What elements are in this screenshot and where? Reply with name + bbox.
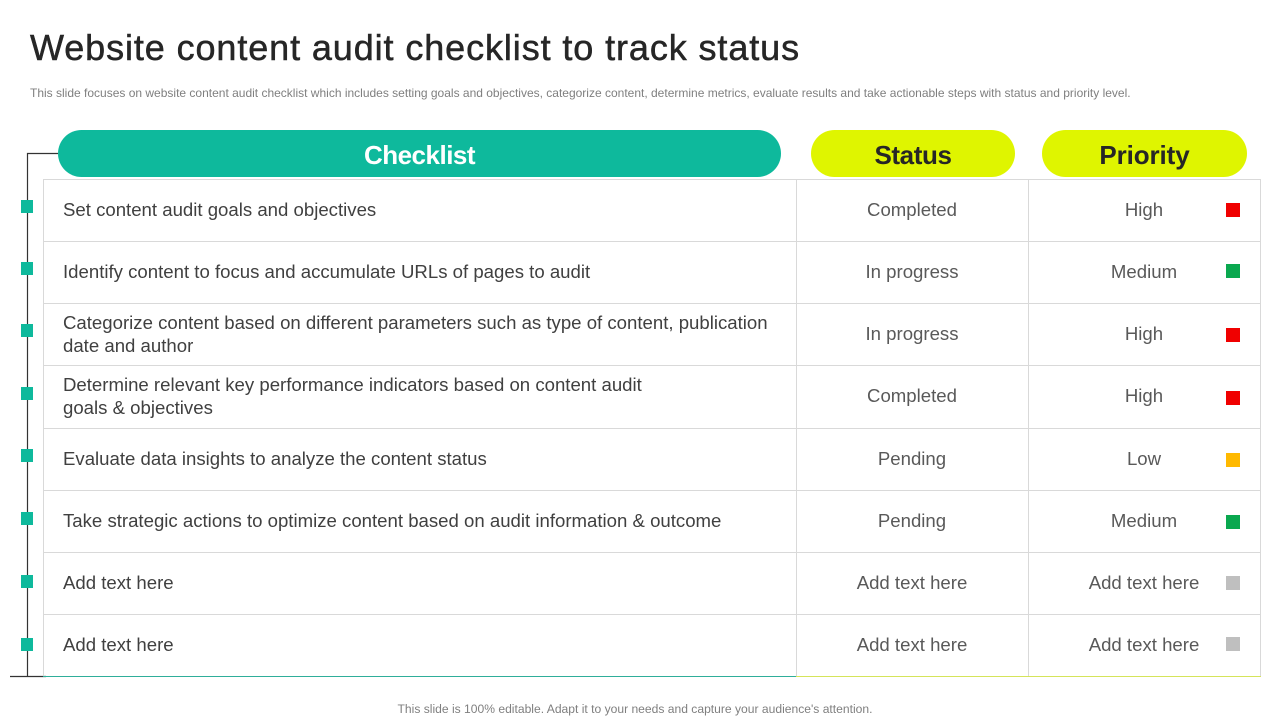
header: checklist: Checklist (364, 140, 475, 170)
row 4 (21, 374, 1240, 418)
row 7 (21, 572, 1240, 593)
header: status: Status (874, 140, 952, 170)
footer note: This slide is 100% editable. Adapt it to your needs and capture your audience's attention. (398, 702, 872, 716)
row 6: Take strategic actions to optimize content based on audit information & outcome (63, 510, 721, 531)
row 7: Add text here (1089, 572, 1199, 593)
row 4: High (1125, 385, 1163, 406)
row 3: In progress (865, 323, 958, 344)
row 4: Completed (867, 385, 957, 406)
row 5: Evaluate data insights to analyze the content status (63, 448, 487, 469)
row 1: Completed (867, 199, 957, 220)
header: checklist (58, 130, 781, 177)
connector timeline (10, 152, 58, 678)
row 6: Pending (878, 510, 946, 531)
row 2 (21, 261, 1240, 282)
row 8: Add text here (857, 634, 967, 655)
row 8: Add text here (63, 634, 174, 655)
row 3 (21, 312, 1240, 356)
row 1 (21, 199, 1240, 220)
row 6: Medium (1111, 510, 1177, 531)
row 1: High (1125, 199, 1163, 220)
row 3: date and author (63, 335, 193, 356)
row 4: Determine relevant key performance indicators based on content audit (63, 374, 642, 395)
row 5 (21, 448, 1240, 469)
row 8 (21, 634, 1240, 655)
row 1: Set content audit goals and objectives (63, 199, 376, 220)
row 3: High (1125, 323, 1163, 344)
row 7: Add text here (63, 572, 174, 593)
row 4: goals & objectives (63, 397, 213, 418)
row 5: Pending (878, 448, 946, 469)
row 2: Medium (1111, 261, 1177, 282)
row 5: Low (1127, 448, 1161, 469)
title: Website content audit checklist to track status (30, 27, 800, 68)
header: status (811, 130, 1015, 177)
row 3: Categorize content based on different parameters such as type of content, publication (63, 312, 768, 333)
subtitle: This slide focuses on website content audit checklist which includes setting goals and objectives, categorize content, determine metrics, evaluate results and take actionable steps with status and priority level. (30, 86, 1131, 100)
header: priority (1042, 130, 1247, 177)
header: priority: Priority (1099, 140, 1190, 170)
row 8: Add text here (1089, 634, 1199, 655)
row 7: Add text here (857, 572, 967, 593)
row 2: Identify content to focus and accumulate URLs of pages to audit (63, 261, 590, 282)
row 6 (21, 510, 1240, 531)
row 2: In progress (865, 261, 958, 282)
